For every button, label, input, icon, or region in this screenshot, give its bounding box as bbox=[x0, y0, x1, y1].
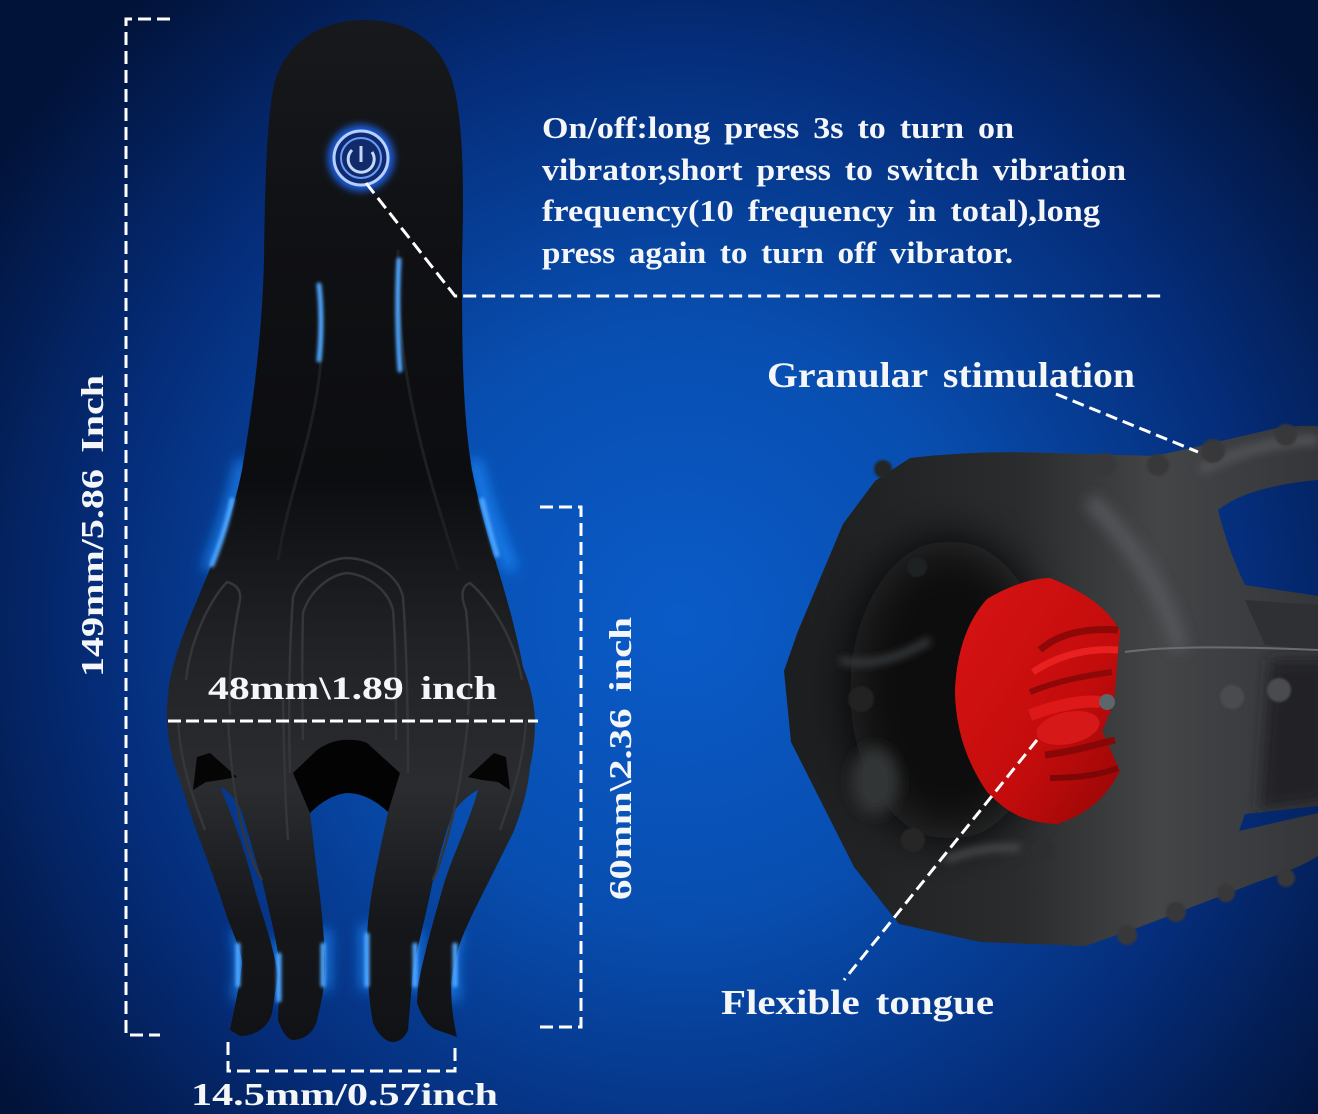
label: tip width: 14.5mm/0.57inch bbox=[191, 1076, 498, 1112]
icon: power button bbox=[328, 125, 394, 191]
rear shaft shade bbox=[1260, 660, 1318, 810]
left dark hole bbox=[193, 753, 237, 790]
upper bar shade bbox=[1200, 440, 1318, 470]
red tongue bbox=[955, 578, 1120, 824]
product: mouth close-up bbox=[784, 424, 1318, 946]
side light streaks bbox=[212, 260, 497, 1000]
label: granular stimulation: Granular stimulation bbox=[767, 355, 1135, 395]
horizontal seam bbox=[1125, 647, 1318, 652]
dimension: total height bbox=[126, 19, 170, 1035]
text block: on/off instructions: press again to turn off vibrator. bbox=[542, 235, 1013, 270]
right dark hole bbox=[468, 753, 510, 790]
label: lower height: 60mm\2.36 inch bbox=[602, 617, 638, 900]
text block: on/off instructions: vibrator,short press to switch vibration bbox=[542, 152, 1126, 187]
leader: granular stimulation bbox=[1056, 394, 1198, 452]
inner dark cavity bbox=[850, 540, 1050, 840]
ribs and panels bbox=[178, 558, 526, 880]
studs bbox=[848, 424, 1297, 945]
dimension: tip width bbox=[228, 1042, 455, 1071]
blue edge glow bbox=[208, 460, 512, 1000]
leader: flexible tongue bbox=[844, 740, 1037, 980]
tongue ridges bbox=[1030, 630, 1118, 778]
rim highlight bbox=[1090, 500, 1180, 650]
grey notch bbox=[1099, 694, 1115, 710]
dark centre arch opening bbox=[293, 740, 400, 813]
tongue central lobe bbox=[1033, 706, 1103, 750]
text block: on/off instructions bbox=[542, 110, 1126, 270]
label: flexible tongue: Flexible tongue bbox=[721, 983, 994, 1022]
label: total height: 149mm/5.86 Inch bbox=[74, 375, 110, 677]
product: front view bbox=[167, 20, 535, 1042]
outer silhouette bbox=[784, 426, 1318, 946]
text block: on/off instructions: frequency(10 frequency in total),long bbox=[542, 193, 1101, 228]
lower rim highlight bbox=[945, 848, 1020, 860]
dimension: width bbox=[168, 720, 538, 722]
dimension: lower height bbox=[540, 507, 581, 1027]
text block: on/off instructions: On/off:long press 3s to turn on bbox=[542, 110, 1014, 145]
left fold highlights bbox=[840, 640, 930, 662]
lower rear shade bbox=[1245, 600, 1305, 648]
shading bbox=[840, 440, 1318, 860]
leader: power button bbox=[366, 183, 1165, 296]
label: width: 48mm\1.89 inch bbox=[208, 671, 497, 707]
lower left pad bbox=[851, 747, 899, 815]
body silhouette bbox=[167, 20, 535, 1042]
